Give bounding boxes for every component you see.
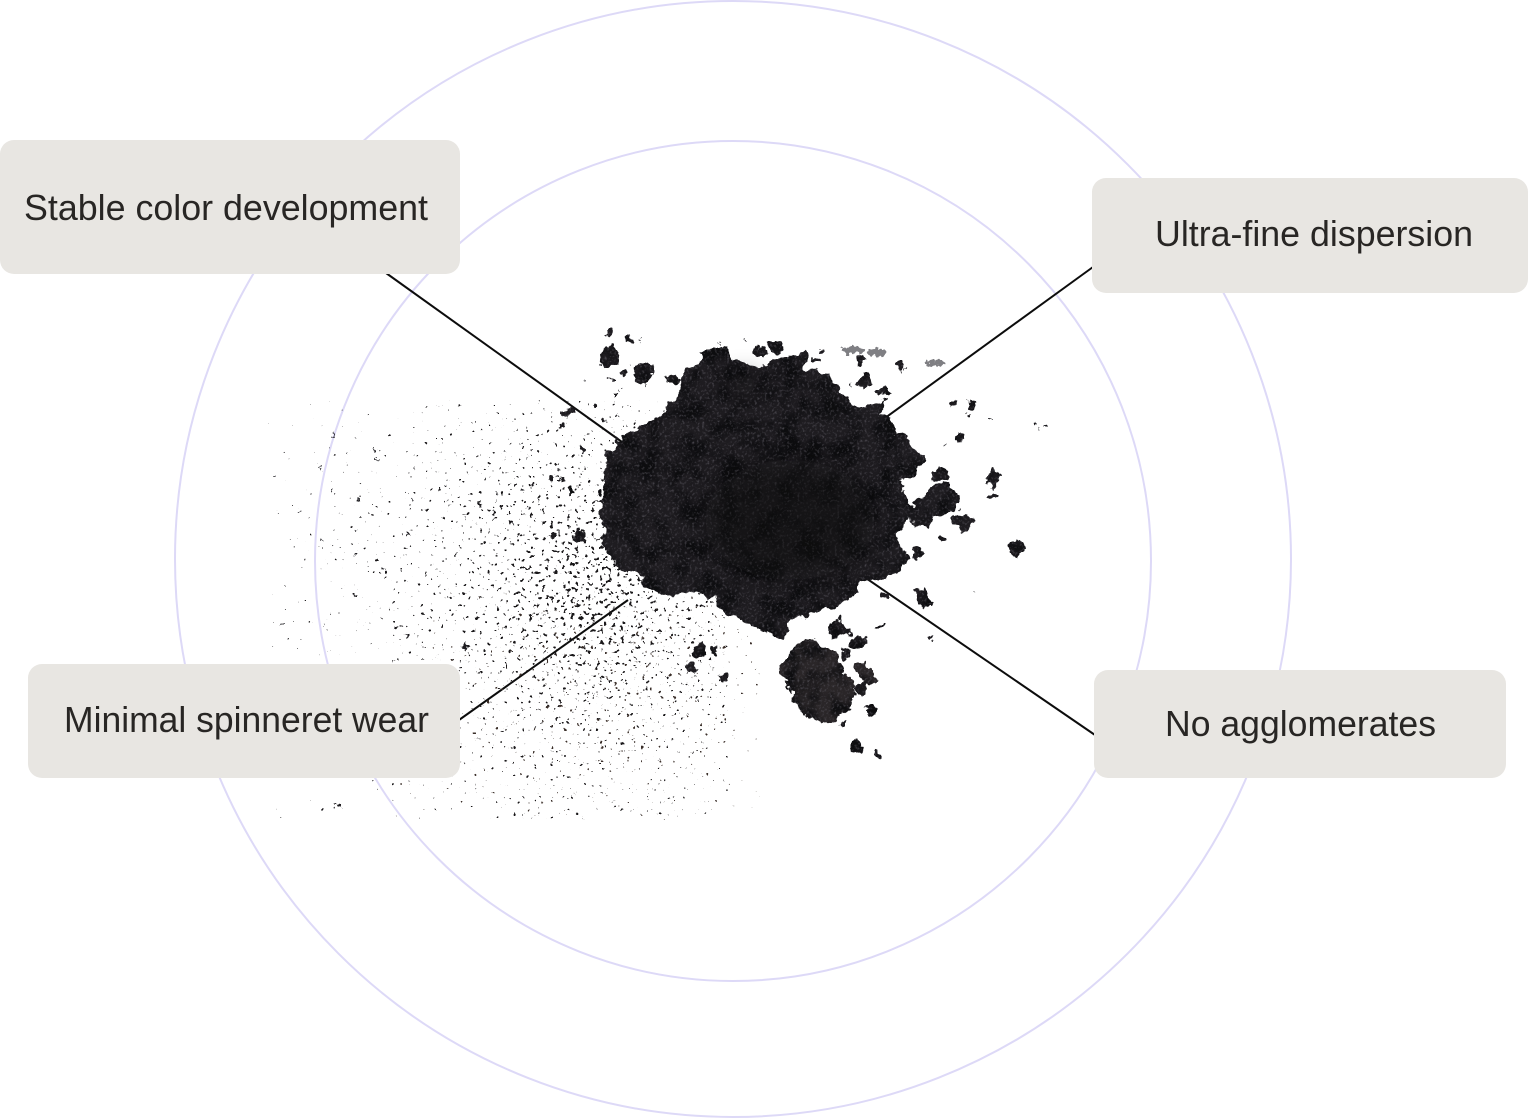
medium dark specks xyxy=(323,395,968,810)
main powder heap and fragments xyxy=(562,328,1027,759)
callout: no agglomerates xyxy=(1094,670,1506,778)
callout: stable color development xyxy=(0,140,460,274)
dust scatter, brown xyxy=(390,590,760,820)
fine dark specks xyxy=(275,340,1045,625)
callout: minimal spinneret wear xyxy=(28,664,460,778)
grey dusty flecks top right xyxy=(842,346,946,366)
powder pile image xyxy=(268,328,1045,820)
callout: minimal spinneret wear: Minimal spinneret wear xyxy=(64,699,429,740)
dust scatter, dark xyxy=(268,400,728,820)
connector lines xyxy=(386,267,1095,735)
outer ring xyxy=(175,1,1291,1117)
callout: no agglomerates: No agglomerates xyxy=(1165,703,1436,744)
callout: ultra-fine dispersion: Ultra-fine dispersion xyxy=(1155,213,1473,254)
inner ring xyxy=(315,141,1151,981)
soft dark shading in heap xyxy=(705,373,875,580)
large specks xyxy=(338,425,578,805)
callout: ultra-fine dispersion xyxy=(1092,178,1528,293)
callout: stable color development: Stable color development xyxy=(24,187,428,228)
